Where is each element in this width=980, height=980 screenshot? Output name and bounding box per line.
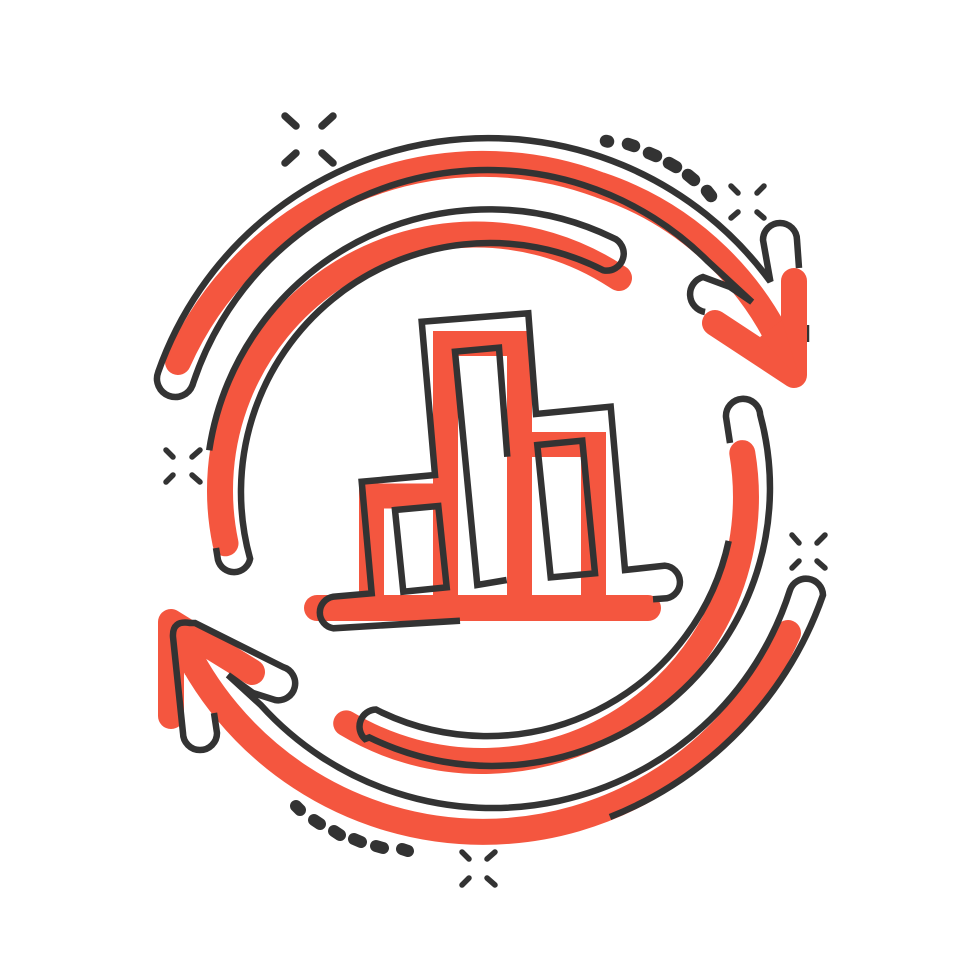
arrow: outer top arc with arrowhead [157, 138, 806, 397]
sparkle: right [792, 535, 825, 568]
dotted line: top right [606, 141, 711, 196]
sparkle: top left [285, 116, 333, 163]
arc: inner top segment [209, 209, 624, 572]
sparkle: bottom [462, 852, 495, 885]
dotted line: bottom left [296, 806, 408, 851]
bar chart [317, 313, 680, 628]
sparkle: left [166, 450, 200, 482]
sparkle: top right [731, 186, 764, 218]
arrow: outer bottom arc with arrowhead [171, 579, 823, 832]
arc: inner bottom segment [346, 399, 770, 766]
